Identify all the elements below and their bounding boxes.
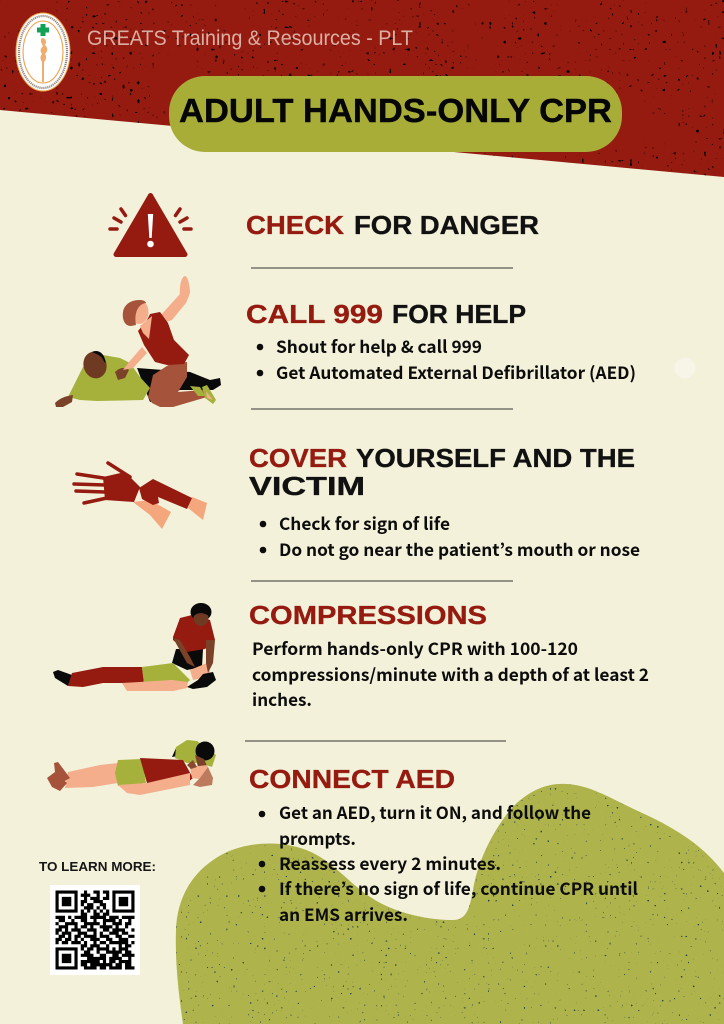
illustration: gloved hands <box>74 463 207 529</box>
text: compressions <box>252 635 649 711</box>
list: cover: Check for sign of life <box>279 510 450 535</box>
list: connect AED <box>259 799 638 926</box>
text: compressions: Perform hands-only CPR with 100-120 <box>252 635 578 660</box>
list: call for help: Get Automated External Defibrillator (AED) <box>276 359 636 384</box>
heading: check for danger: FOR DANGER <box>354 210 539 240</box>
heading: call 999: CALL 999 <box>246 299 383 329</box>
illustration: connect AED <box>47 740 216 795</box>
text: compressions: compressions/minute with a depth of at least 2 <box>252 661 649 686</box>
header text: GREATS Training & Resources - PLT <box>87 27 413 50</box>
list: cover <box>260 510 640 561</box>
heading: call 999 <box>246 299 526 329</box>
list: call for help <box>257 333 636 384</box>
title pill <box>169 76 622 152</box>
list: cover: Do not go near the patient’s mouth or nose <box>279 536 640 561</box>
heading: check for danger: CHECK <box>246 210 344 240</box>
pale dot <box>674 358 696 378</box>
list: connect AED: If there’s no sign of life, continue CPR until <box>279 875 638 900</box>
red header band <box>0 0 724 180</box>
label: to learn more: TO LEARN MORE: <box>39 859 156 874</box>
list: connect AED: Reassess every 2 minutes. <box>279 850 501 875</box>
heading: check for danger <box>246 210 539 240</box>
list: call for help: Shout for help & call 999 <box>276 333 482 358</box>
illustration: rescuer calling for help <box>55 276 221 407</box>
heading: compressions: COMPRESSIONS <box>249 600 487 630</box>
heading: cover: VICTIM <box>249 471 365 501</box>
list: connect AED: prompts. <box>279 825 356 850</box>
green blob decoration <box>170 780 724 1024</box>
heading: cover: COVER <box>249 443 347 473</box>
title pill: ADULT HANDS-ONLY CPR <box>179 92 612 129</box>
heading: call 999: FOR HELP <box>392 299 526 329</box>
list: connect AED: an EMS arrives. <box>279 901 408 926</box>
heading: cover: YOURSELF AND THE <box>356 443 635 473</box>
heading: cover <box>249 443 635 501</box>
icon: warning triangle <box>110 196 191 254</box>
QR code <box>50 885 140 975</box>
list: connect AED: Get an AED, turn it ON, and follow the <box>279 799 591 824</box>
logo <box>16 13 70 91</box>
heading: connect AED: CONNECT AED <box>249 764 455 794</box>
text: compressions: inches. <box>252 686 312 711</box>
illustration: compressions <box>53 603 216 691</box>
